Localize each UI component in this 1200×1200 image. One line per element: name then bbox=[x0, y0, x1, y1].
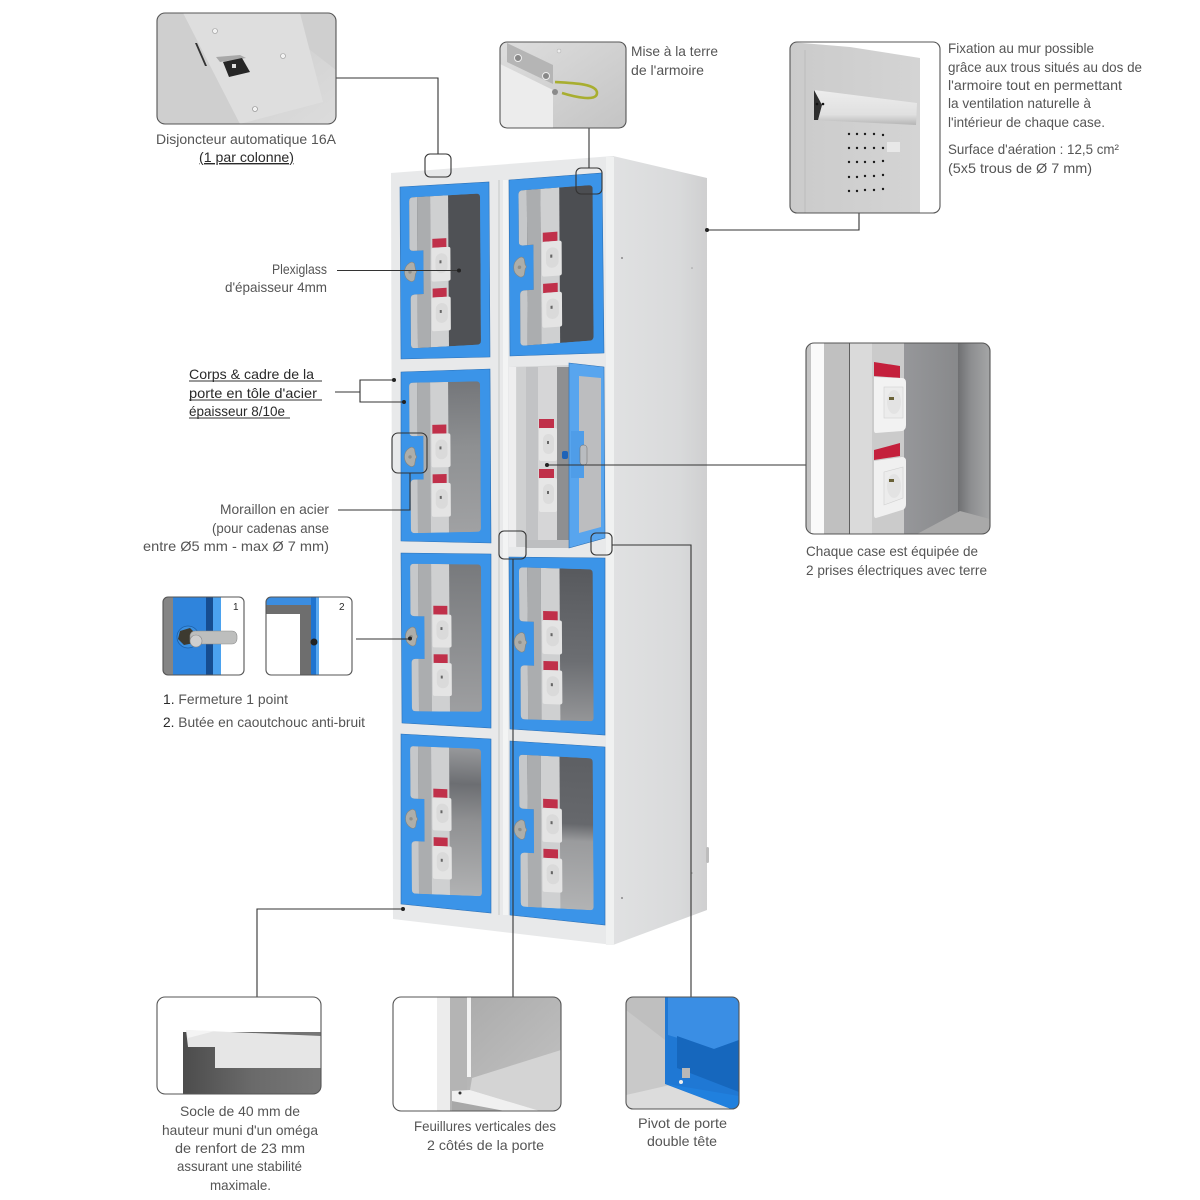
caption: wall fixing and vents bbox=[948, 40, 1142, 176]
caption: steel hasp: entre Ø5 mm - max Ø 7 mm) bbox=[143, 538, 329, 554]
caption: lock and rubber stop: 1. Fermeture 1 point bbox=[163, 691, 288, 707]
locker cabinet bbox=[391, 156, 709, 945]
photo: earth wire bbox=[500, 42, 626, 128]
caption: wall fixing and vents: l'armoire tout en permettant bbox=[948, 77, 1122, 93]
caption: vertical rebates bbox=[414, 1118, 556, 1153]
open compartment: row 2 column 2 bbox=[509, 365, 572, 548]
caption: vertical rebates: Feuillures verticales des bbox=[414, 1118, 556, 1134]
caption: door pivot: double tête bbox=[647, 1133, 717, 1149]
caption: circuit breaker bbox=[156, 131, 337, 165]
caption: earth wire bbox=[631, 43, 718, 78]
door: row 4 column 1 bbox=[401, 734, 492, 913]
door: row 1 column 2 bbox=[509, 173, 604, 356]
caption: wall fixing and vents: grâce aux trous situés au dos de bbox=[948, 59, 1142, 75]
caption: plexiglass: d'épaisseur 4mm bbox=[225, 279, 327, 295]
caption: base plinth: de renfort de 23 mm bbox=[175, 1140, 305, 1156]
caption: wall fixing and vents: Fixation au mur possible bbox=[948, 40, 1094, 56]
photo 2: rubber stop bbox=[266, 597, 352, 675]
caption: vertical rebates: 2 côtés de la porte bbox=[427, 1137, 544, 1153]
caption: circuit breaker: Disjoncteur automatique 16A bbox=[156, 131, 337, 147]
caption: base plinth: hauteur muni d'un oméga bbox=[162, 1122, 318, 1138]
caption: wall fixing and vents: l'intérieur de chaque case. bbox=[948, 114, 1105, 130]
caption: steel body and door frame: porte en tôle d'acier bbox=[189, 385, 317, 401]
caption: steel body and door frame: épaisseur 8/10e bbox=[189, 403, 285, 419]
photo 2: rubber stop: 2 bbox=[339, 602, 345, 613]
caption: plexiglass: Plexiglass bbox=[272, 261, 327, 277]
open door bbox=[562, 363, 605, 548]
caption: electrical sockets: Chaque case est équipée de bbox=[806, 543, 978, 559]
door: row 3 column 1 bbox=[401, 553, 492, 728]
caption: lock and rubber stop: 2. Butée en caoutchouc anti-bruit bbox=[163, 714, 365, 730]
caption: circuit breaker: (1 par colonne) bbox=[199, 149, 294, 165]
caption: wall fixing and vents: la ventilation naturelle à bbox=[948, 95, 1091, 111]
caption: lock and rubber stop bbox=[163, 691, 365, 730]
caption: base plinth bbox=[162, 1103, 318, 1193]
door: row 2 column 1 bbox=[400, 369, 491, 543]
leader lines and callout markers bbox=[257, 78, 859, 997]
photo: circuit breaker bbox=[157, 13, 336, 124]
caption: electrical sockets bbox=[806, 543, 987, 578]
door: row 4 column 2 bbox=[510, 741, 605, 925]
caption: steel body and door frame bbox=[189, 366, 322, 419]
caption: door pivot bbox=[638, 1115, 727, 1149]
caption: door pivot: Pivot de porte bbox=[638, 1115, 727, 1131]
caption: electrical sockets: 2 prises électriques avec terre bbox=[806, 562, 987, 578]
caption: steel body and door frame: Corps & cadre de la bbox=[189, 366, 314, 382]
caption: steel hasp bbox=[143, 501, 329, 554]
caption: wall fixing and vents: (5x5 trous de Ø 7 mm) bbox=[948, 160, 1092, 176]
caption: steel hasp: (pour cadenas anse bbox=[212, 520, 329, 536]
photo 1: one-point lock: 1 bbox=[233, 602, 239, 613]
photo: base plinth bbox=[157, 997, 321, 1094]
caption: base plinth: Socle de 40 mm de bbox=[180, 1103, 300, 1119]
caption: plexiglass bbox=[225, 261, 327, 295]
caption: base plinth: maximale. bbox=[210, 1177, 271, 1193]
photo: door pivot bbox=[626, 997, 739, 1112]
photo: wall fixing and vents bbox=[790, 42, 940, 213]
caption: steel hasp: Moraillon en acier bbox=[220, 501, 329, 517]
caption: base plinth: assurant une stabilité bbox=[177, 1158, 302, 1174]
door: row 3 column 2 bbox=[509, 556, 605, 735]
door: row 1 column 1 bbox=[400, 182, 491, 359]
caption: wall fixing and vents: Surface d'aération : 12,5 cm² bbox=[948, 141, 1119, 157]
cabinet front frame bbox=[391, 156, 613, 945]
photo: electrical sockets bbox=[806, 343, 990, 534]
photo: vertical rebates bbox=[393, 997, 561, 1111]
caption: earth wire: Mise à la terre bbox=[631, 43, 718, 59]
cabinet side face bbox=[613, 156, 707, 945]
caption: earth wire: de l'armoire bbox=[631, 62, 704, 78]
photo 1: one-point lock bbox=[163, 597, 244, 675]
